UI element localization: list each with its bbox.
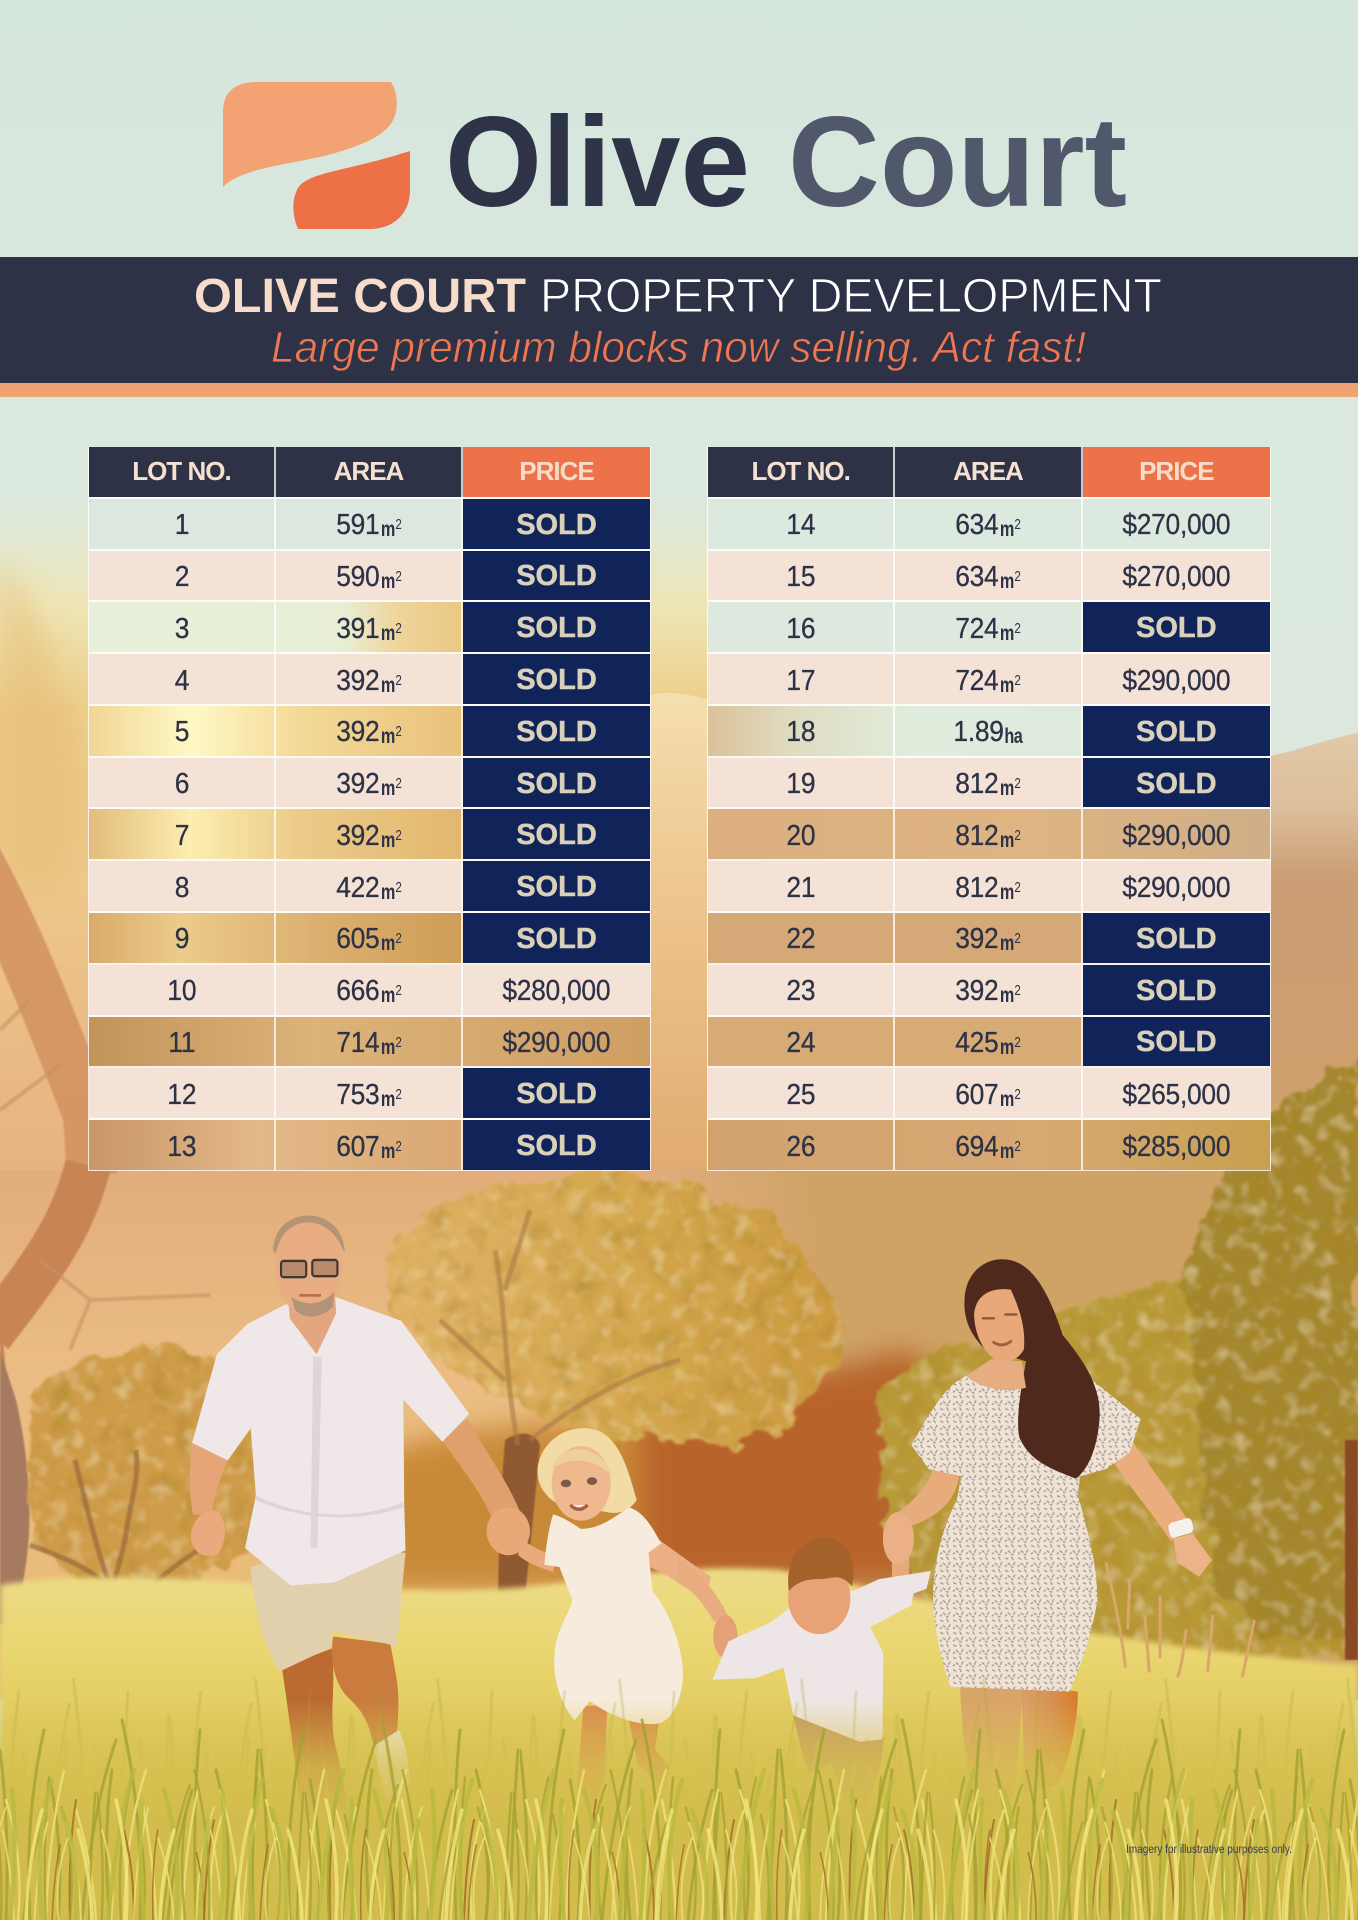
table header: PRICE	[1139, 456, 1214, 486]
lot 21: $290,000	[1122, 872, 1230, 904]
lot 6: m2	[380, 775, 400, 800]
girl arm holding father	[518, 1538, 557, 1572]
lot 21	[708, 861, 1270, 913]
lot 16: m2	[999, 620, 1020, 645]
lot 1: m2	[380, 516, 400, 541]
lot 4: 392	[336, 665, 379, 697]
lot 8: SOLD	[516, 871, 597, 903]
lot 18: 18	[786, 716, 815, 748]
distant field behind family	[0, 1170, 1358, 1700]
lot 13	[89, 1120, 650, 1170]
lot 23: m2	[999, 982, 1020, 1007]
father shirt	[192, 1297, 469, 1585]
lot 26: 694	[955, 1131, 998, 1163]
lot 13: m2	[380, 1138, 400, 1163]
branches of left bush	[30, 1450, 205, 1595]
mother legs	[960, 1684, 1078, 1816]
lot 3	[89, 602, 650, 654]
lot 9: SOLD	[516, 923, 597, 955]
lot 26	[708, 1120, 1270, 1170]
lot 26: $285,000	[1122, 1131, 1230, 1163]
lot 1: 1	[174, 509, 189, 541]
lot 22: SOLD	[1136, 923, 1217, 955]
bush on left	[26, 1346, 265, 1590]
banner background	[0, 257, 1358, 383]
lot 10: 666	[336, 975, 379, 1007]
lot 24: m2	[999, 1034, 1020, 1059]
lot 22: 392	[955, 923, 998, 955]
lot 1	[89, 499, 650, 551]
lot 24: SOLD	[1136, 1026, 1217, 1058]
lot 19: SOLD	[1136, 768, 1217, 800]
girl legs	[577, 1706, 670, 1806]
girl hand holding boy	[678, 1558, 728, 1622]
lot 12: 753	[336, 1079, 379, 1111]
lot 13: 13	[167, 1131, 196, 1163]
lot 16: 724	[955, 613, 998, 645]
table header: LOT NO.	[751, 456, 850, 486]
lot 7	[89, 809, 650, 861]
midground bushes behind father and girl	[370, 1420, 720, 1590]
lot 7: 392	[336, 820, 379, 852]
lot 12: SOLD	[516, 1078, 597, 1110]
logo word: Court: Court	[788, 91, 1127, 234]
lot 3: 391	[336, 613, 379, 645]
lot 10: $280,000	[503, 975, 610, 1007]
lot 20: 812	[955, 820, 998, 852]
lot 15: 634	[955, 561, 998, 593]
lot 21: 21	[786, 872, 815, 904]
lot 12	[89, 1068, 650, 1120]
lot 26: m2	[999, 1138, 1020, 1163]
girl dress	[544, 1507, 683, 1724]
girl arm holding boy	[622, 1522, 711, 1601]
central tree trunk and branches	[440, 1210, 680, 1625]
table header	[89, 447, 650, 499]
lot 3: 3	[174, 613, 189, 645]
lot 5	[89, 706, 650, 758]
sky	[0, 0, 1358, 1250]
lot 11	[89, 1017, 650, 1068]
lot 2: 2	[174, 561, 189, 593]
title banner	[0, 257, 1358, 397]
lot 6: 6	[174, 768, 189, 800]
large tree top right	[1181, 1055, 1358, 1640]
lot 14: 14	[786, 509, 815, 541]
lot 4: SOLD	[516, 664, 597, 696]
mother dress	[911, 1376, 1141, 1692]
lot 24: 24	[786, 1027, 815, 1059]
lot 20: 20	[786, 820, 815, 852]
lot 16: SOLD	[1136, 612, 1217, 644]
lot 4: m2	[380, 672, 400, 697]
lot 2: SOLD	[516, 560, 597, 592]
father legs	[282, 1637, 409, 1840]
lot 17: 724	[955, 665, 998, 697]
father shorts	[251, 1548, 406, 1671]
lot 18: SOLD	[1136, 716, 1217, 748]
lot 2: m2	[380, 568, 400, 593]
central tree canopy	[385, 1171, 842, 1445]
table header: PRICE	[519, 456, 594, 486]
banner stripe	[0, 383, 1358, 397]
lot 19: 812	[955, 768, 998, 800]
sunset glow on left	[0, 500, 720, 1260]
lot 8: m2	[380, 879, 400, 904]
lot 5: m2	[380, 723, 400, 748]
logo mark: peach leaf	[223, 82, 397, 187]
lot 15: m2	[999, 568, 1020, 593]
lot 7: m2	[380, 827, 400, 852]
table header: AREA	[334, 456, 403, 486]
boy raised hand	[892, 1543, 909, 1582]
girl hair	[538, 1428, 637, 1513]
lot 4: 4	[174, 665, 189, 697]
lot 21: 812	[955, 872, 998, 904]
lot 5: SOLD	[516, 716, 597, 748]
lot 25	[708, 1068, 1270, 1120]
figures: boy and mother	[678, 1259, 1254, 1816]
mother hair and face	[964, 1259, 1100, 1479]
lot 25: 607	[955, 1079, 998, 1111]
lot 5: 5	[174, 716, 189, 748]
lot 9: m2	[380, 930, 400, 955]
lot 18	[708, 706, 1270, 758]
boy head	[788, 1537, 853, 1634]
figures: father and girl	[190, 1215, 711, 1840]
lot 11: $290,000	[503, 1027, 610, 1059]
lot 25: 25	[786, 1079, 815, 1111]
lot 9	[89, 913, 650, 965]
lot 4	[89, 654, 650, 706]
lot 11: 714	[336, 1027, 379, 1059]
lot 23	[708, 965, 1270, 1017]
olive bushes on right	[880, 1240, 1358, 1660]
lot 19: m2	[999, 775, 1020, 800]
lot 11: 11	[168, 1027, 195, 1059]
lot 10	[89, 965, 650, 1017]
lot 3: SOLD	[516, 612, 597, 644]
lot 12: m2	[380, 1086, 400, 1111]
father head	[273, 1215, 345, 1354]
lot 13: 607	[336, 1131, 379, 1163]
lot 17: m2	[999, 672, 1020, 697]
lot 3: m2	[380, 620, 400, 645]
lot 15: 15	[786, 561, 815, 593]
lot 6: 392	[336, 768, 379, 800]
lot 10: m2	[380, 982, 400, 1007]
lot 13: SOLD	[516, 1130, 597, 1162]
lot 25: $265,000	[1122, 1079, 1230, 1111]
lot 24	[708, 1017, 1270, 1068]
sun glow	[65, 600, 365, 860]
dark trees in the midground	[640, 1350, 1000, 1585]
lot 22	[708, 913, 1270, 965]
lot 24: 425	[955, 1027, 998, 1059]
lot 20: m2	[999, 827, 1020, 852]
lot 7: 7	[174, 820, 189, 852]
tree on left edge	[0, 830, 210, 1625]
lot 5: 392	[336, 716, 379, 748]
lot 21: m2	[999, 879, 1020, 904]
mother left arm and hand	[883, 1469, 959, 1565]
lot 22: m2	[999, 930, 1020, 955]
lot 8	[89, 861, 650, 913]
lot 19: 19	[786, 768, 815, 800]
lot 20: $290,000	[1122, 820, 1230, 852]
lot 15	[708, 551, 1270, 602]
hills on the right	[655, 695, 1358, 1260]
lot 14: 634	[955, 509, 998, 541]
lot 14	[708, 499, 1270, 551]
mother right arm and hand	[1094, 1419, 1212, 1577]
lot 11: m2	[380, 1034, 400, 1059]
lot 23: SOLD	[1136, 975, 1217, 1007]
table header: AREA	[953, 456, 1023, 486]
lot 8: 8	[174, 872, 189, 904]
boy shirt	[712, 1571, 931, 1742]
dry wildflowers by mother	[1106, 1562, 1254, 1677]
lot 9: 605	[336, 923, 379, 955]
foreground grass	[0, 1560, 1358, 1920]
lot 17: 17	[786, 665, 815, 697]
lot 8: 422	[336, 872, 379, 904]
lot 16	[708, 602, 1270, 654]
heading light part: PROPERTY DEVELOPMENT	[540, 270, 1162, 323]
meadow	[0, 1568, 1358, 1920]
lot 15: $270,000	[1122, 561, 1230, 593]
lot 2: 590	[336, 561, 379, 593]
table header: LOT NO.	[132, 456, 231, 486]
lot 23: 23	[786, 975, 815, 1007]
girl face	[552, 1446, 611, 1521]
lot 19	[708, 758, 1270, 809]
lot 20	[708, 809, 1270, 861]
boy trousers	[793, 1715, 884, 1811]
father arms and hands	[190, 1419, 530, 1556]
hazy foliage at left edge	[0, 560, 81, 900]
tagline: Large premium blocks now selling. Act fast!	[271, 323, 1086, 372]
lot 14: m2	[999, 516, 1020, 541]
gap hillside between tables	[650, 693, 710, 1180]
table: lots 14 to 26	[707, 446, 1271, 1171]
lot 9: 9	[174, 923, 189, 955]
table: lots 1 to 13	[88, 446, 651, 1171]
logo word: Olive: Olive	[445, 91, 750, 234]
lot 14: $270,000	[1122, 509, 1230, 541]
lot 7: SOLD	[516, 819, 597, 851]
lot 26: 26	[786, 1131, 815, 1163]
lot 22: 22	[786, 923, 815, 955]
lot 6: SOLD	[516, 768, 597, 800]
lot 6	[89, 758, 650, 809]
lot 17: $290,000	[1122, 665, 1230, 697]
lot 12: 12	[167, 1079, 196, 1111]
table header	[708, 447, 1270, 499]
lot 10: 10	[167, 975, 196, 1007]
lot 18: ha	[1005, 725, 1022, 748]
lot 23: 392	[955, 975, 998, 1007]
logo	[223, 82, 1127, 234]
lot 1: 591	[336, 509, 379, 541]
lot 16: 16	[786, 613, 815, 645]
lot 17	[708, 654, 1270, 706]
logo mark: orange leaf	[293, 151, 410, 229]
lot 2	[89, 551, 650, 602]
lot 1: SOLD	[516, 509, 597, 541]
lot 25: m2	[999, 1086, 1020, 1111]
lot 18: 1.89	[953, 716, 1004, 748]
heading bold part: OLIVE COURT	[194, 270, 526, 323]
